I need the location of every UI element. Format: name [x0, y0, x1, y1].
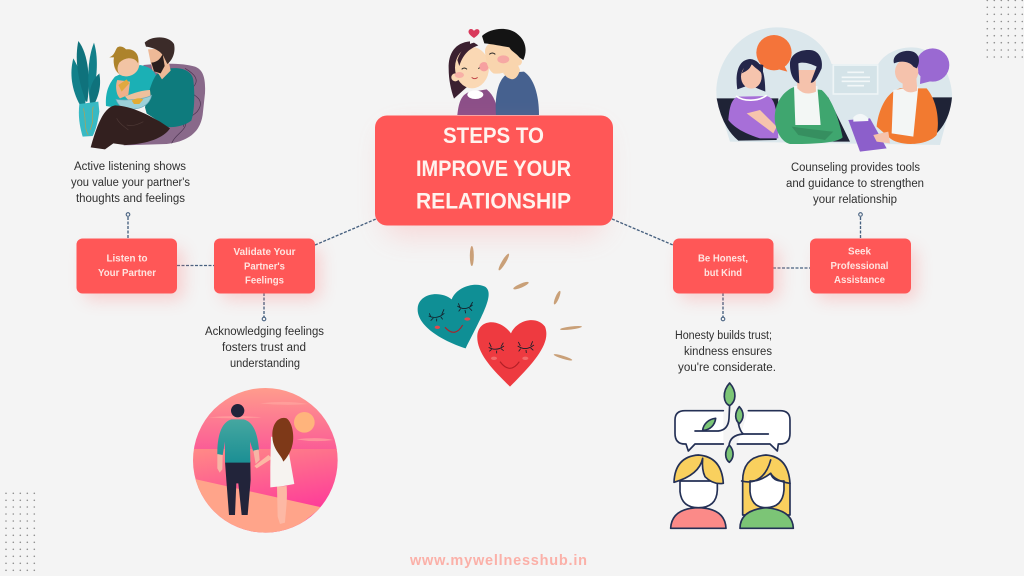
caption: active listening: Active listening shows	[74, 161, 186, 173]
step box: be honest but kind: Be Honest,	[698, 254, 748, 264]
center title block: RELATIONSHIP	[416, 188, 571, 214]
step box: seek professional assistance: Seek	[848, 246, 871, 258]
step box: seek professional assistance: Professional	[830, 261, 889, 272]
illustration: two smiling hearts	[418, 246, 582, 387]
step box: listen to your partner	[76, 238, 184, 300]
dot pattern: top right	[986, 0, 1023, 58]
step box: validate your partner's feelings: Validate Your	[234, 247, 296, 258]
step box: validate your partner's feelings	[214, 238, 321, 300]
caption: counseling: Counseling provides tools	[791, 162, 920, 174]
step box: seek professional assistance	[810, 238, 917, 300]
step box: listen to your partner: Listen to	[106, 254, 148, 264]
step box: listen to your partner: Your Partner	[98, 268, 156, 279]
illustration: couple walking at sunset	[192, 387, 339, 537]
step box: validate your partner's feelings: Partner's	[244, 262, 285, 272]
center title block	[375, 116, 613, 235]
caption: counseling: and guidance to strengthen	[786, 178, 924, 190]
caption: honesty	[675, 330, 776, 374]
center title block: IMPROVE YOUR	[416, 156, 571, 181]
caption: active listening	[71, 161, 190, 205]
center title block: STEPS TO	[443, 123, 544, 148]
caption: counseling	[786, 162, 924, 206]
connector lines	[126, 213, 862, 321]
step box: be honest but kind	[673, 238, 780, 300]
website footer: www.mywellnesshub.in	[409, 553, 587, 569]
caption: honesty: Honesty builds trust;	[675, 330, 772, 342]
step box: seek professional assistance: Assistance	[834, 275, 885, 286]
illustration: two people talking with vine	[671, 383, 793, 528]
caption: counseling: your relationship	[813, 194, 897, 206]
caption: honesty: kindness ensures	[684, 346, 772, 358]
caption: acknowledging feelings: fosters trust and	[222, 342, 306, 354]
dot pattern: bottom left	[5, 492, 35, 571]
caption: acknowledging feelings: Acknowledging feelings	[205, 326, 324, 338]
illustration: kissing couple	[449, 29, 539, 115]
caption: acknowledging feelings: understanding	[230, 358, 300, 370]
caption: active listening: thoughts and feelings	[76, 193, 185, 205]
caption: acknowledging feelings	[205, 326, 324, 370]
caption: active listening: you value your partner's	[71, 177, 190, 189]
step box: be honest but kind: but Kind	[704, 268, 742, 279]
step box: validate your partner's feelings: Feelings	[245, 276, 284, 286]
illustration: couple on sofa	[71, 37, 205, 149]
illustration: counseling session	[716, 27, 952, 152]
caption: honesty: you're considerate.	[678, 362, 776, 374]
